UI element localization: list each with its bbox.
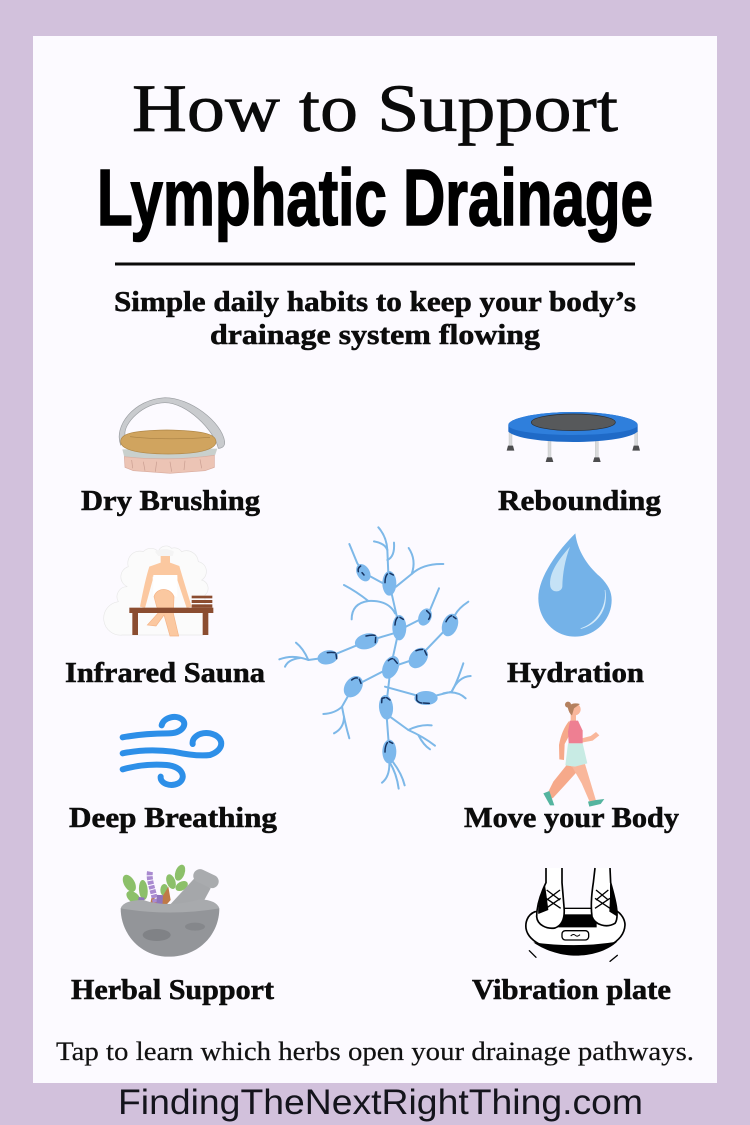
label: Infrared Sauna: Infrared Sauna xyxy=(65,657,266,689)
icon: water drop xyxy=(538,533,612,637)
label: Hydration: Hydration xyxy=(507,657,644,689)
icon: trampoline xyxy=(507,412,640,462)
icon: infrared sauna xyxy=(104,546,213,636)
icon: wind xyxy=(123,717,221,785)
title line one: How to Support xyxy=(132,70,618,146)
call to action note: Tap to learn which herbs open your drainage pathways. xyxy=(56,1037,694,1066)
icon: dry brush xyxy=(119,398,225,473)
subtitle: Simple daily habits to keep your body’s xyxy=(114,286,636,318)
illustration: lymphatic vessels and nodes xyxy=(279,527,471,789)
icon: vibration plate with feet xyxy=(526,868,625,961)
label: Dry Brushing: Dry Brushing xyxy=(81,485,261,517)
icon: walking woman xyxy=(543,702,604,807)
icon: mortar and pestle with herbs xyxy=(120,863,221,957)
subtitle: drainage system flowing xyxy=(210,319,541,351)
label: Move your Body: Move your Body xyxy=(464,802,680,834)
subtitle xyxy=(114,286,636,351)
label: Vibration plate: Vibration plate xyxy=(472,974,671,1006)
footer website: FindingTheNextRightThing.com xyxy=(118,1083,643,1122)
label: Herbal Support: Herbal Support xyxy=(71,974,274,1006)
label: Rebounding: Rebounding xyxy=(498,485,662,517)
label: Deep Breathing: Deep Breathing xyxy=(69,802,278,834)
